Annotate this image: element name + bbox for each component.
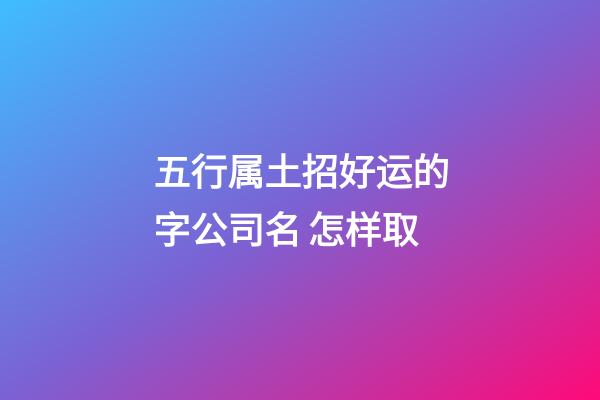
title: 五行属土招好运的 [154,152,450,193]
title [154,152,450,251]
title: 字公司名 怎样取 [154,210,419,251]
